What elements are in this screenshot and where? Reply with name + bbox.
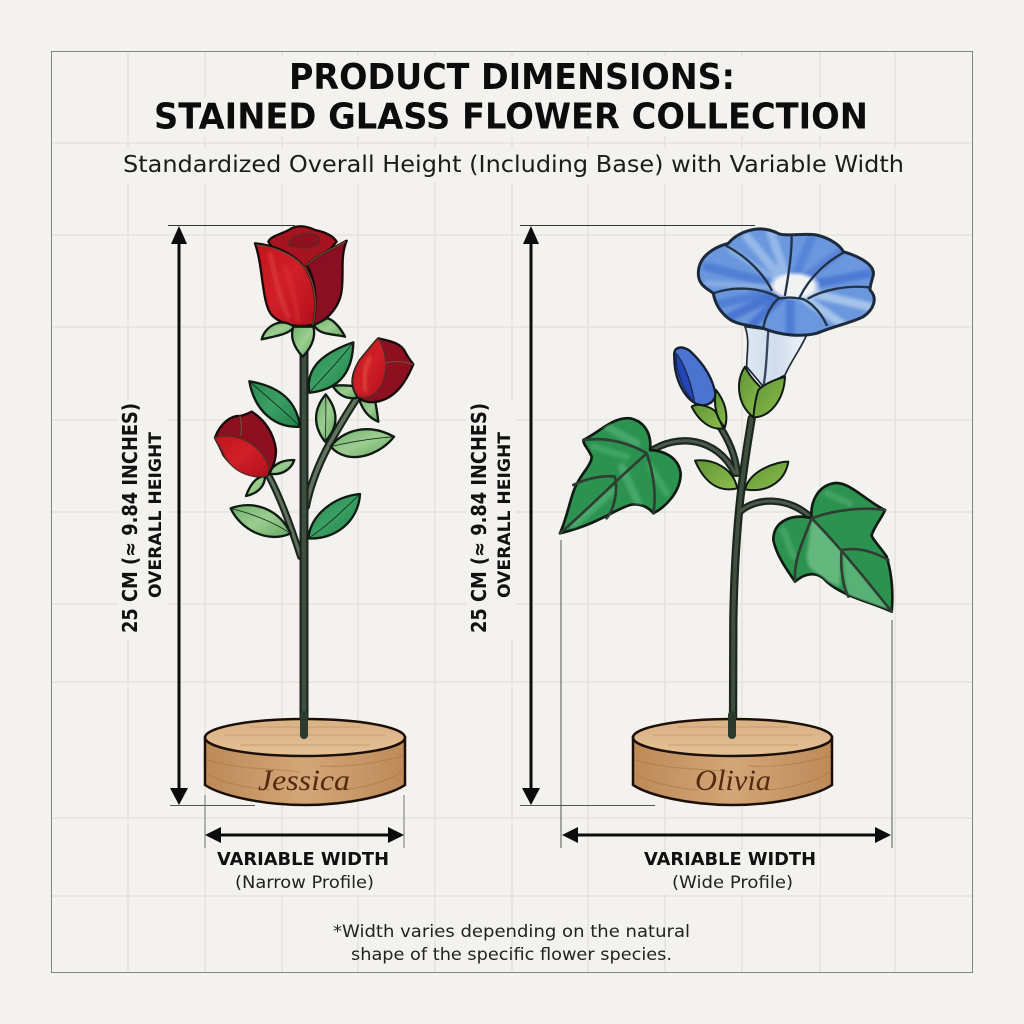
- flower bud: [674, 348, 726, 429]
- footnote: *Width varies depending on the natural: [333, 922, 690, 942]
- rose height label: OVERALL HEIGHT: [146, 432, 166, 598]
- morning glory width dimension: [561, 540, 892, 848]
- morning glory height label: OVERALL HEIGHT: [495, 432, 515, 598]
- morning glory width label: [644, 849, 816, 893]
- small leaves: [695, 460, 788, 490]
- morning glory stems: [650, 418, 812, 735]
- left leaf: [560, 418, 681, 533]
- rose leaves: [231, 342, 394, 538]
- rose width label: [217, 849, 389, 893]
- rose left bud: [246, 460, 294, 496]
- flower tube: [745, 327, 807, 387]
- rose main sepals: [262, 318, 345, 357]
- flower corolla: [698, 229, 874, 337]
- rose right bud: [333, 385, 378, 422]
- flower calyx: [739, 367, 785, 417]
- footnote: shape of the specific flower species.: [351, 945, 672, 965]
- rose main bloom: [268, 226, 337, 273]
- title: PRODUCT DIMENSIONS:: [289, 57, 735, 98]
- name: Olivia: Olivia: [695, 764, 771, 797]
- rose plant: [215, 226, 413, 735]
- morning glory height dimension: [520, 225, 755, 806]
- name: Jessica: Jessica: [258, 764, 350, 797]
- title: STAINED GLASS FLOWER COLLECTION: [154, 96, 868, 138]
- footnote: [333, 922, 690, 965]
- rose height label: 25 CM (≈ 9.84 INCHES): [118, 403, 142, 633]
- right leaf: [773, 483, 892, 612]
- rose height label: [118, 403, 166, 633]
- rose width dimension: [205, 795, 404, 848]
- rose width label: VARIABLE WIDTH: [217, 849, 389, 870]
- rose branches: [306, 398, 357, 507]
- morning glory width label: VARIABLE WIDTH: [644, 849, 816, 870]
- morning glory height label: 25 CM (≈ 9.84 INCHES): [467, 403, 491, 633]
- morning glory width label: (Wide Profile): [672, 873, 793, 893]
- rose base: [205, 715, 405, 805]
- rose stem: [290, 350, 317, 735]
- morning glory plant: [560, 229, 892, 735]
- morning glory base: [633, 715, 832, 805]
- subtitle: Standardized Overall Height (Including Base) with Variable Width: [123, 152, 904, 178]
- rose width label: (Narrow Profile): [235, 873, 374, 893]
- title: [154, 57, 868, 138]
- morning glory height label: [467, 403, 515, 633]
- rose height dimension: [168, 225, 295, 806]
